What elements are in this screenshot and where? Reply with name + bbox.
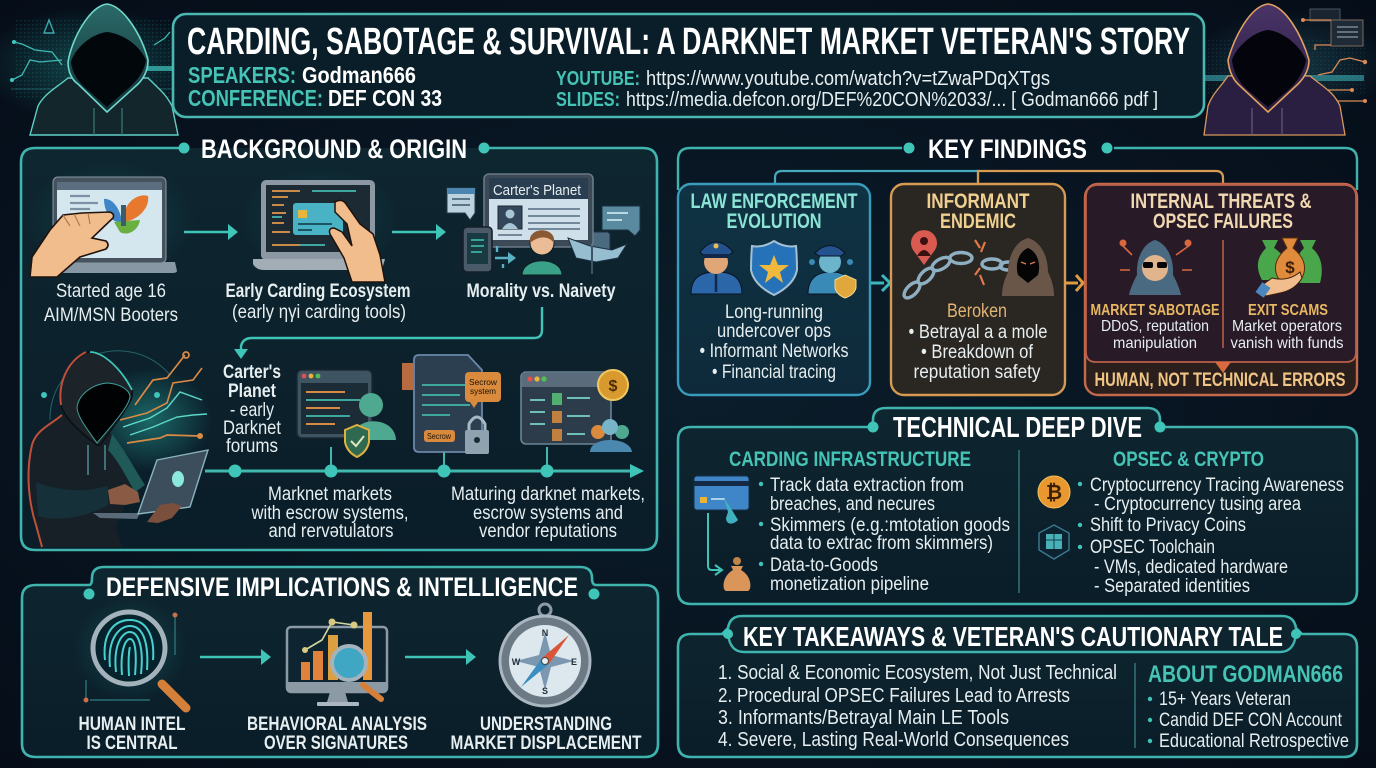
- label: morality vs naivety: Morality vs. Naivety: [466, 281, 616, 302]
- icon: police badge with star: [751, 241, 797, 295]
- subheading: carding infrastructure: CARDING INFRASTRUCTURE: [729, 448, 971, 471]
- label: escrow bubble: Secrow: [469, 378, 497, 387]
- list: carding infrastructure bullets: [759, 475, 1010, 595]
- heading: background and origin: BACKGROUND & ORIGIN: [201, 134, 467, 164]
- arrow: [200, 656, 262, 658]
- arrow head: [436, 224, 446, 240]
- icon: carter's planet forum window with person: [447, 174, 640, 275]
- icon: code window with user and shield: [297, 370, 396, 457]
- youtube label: YOUTUBE:: [556, 68, 640, 90]
- list: carding infrastructure bullets: data to extrac from skimmers): [770, 533, 993, 554]
- label: maturing darknet markets: vendor reputations: [479, 521, 617, 542]
- arrow: [1066, 275, 1083, 291]
- icon: hooded hacker with laptop: [29, 351, 212, 547]
- label: marknet markets: with escrow systems,: [251, 503, 408, 524]
- text: exit scam details: vanish with funds: [1230, 335, 1344, 352]
- icon: credit card with skimmer: [694, 476, 749, 524]
- label: behavioral analysis over signatures: [247, 714, 427, 754]
- icon: compass: [500, 604, 590, 706]
- label: compass west: W: [512, 657, 521, 667]
- label: started age 16: Started age 16: [56, 281, 166, 302]
- text: law enforcement details: [700, 302, 848, 383]
- arrow: [405, 656, 467, 658]
- label: aim msn booters: AIM/MSN Booters: [44, 305, 178, 326]
- icon: police officer: [691, 242, 742, 294]
- label: compass north: N: [542, 628, 548, 638]
- label: dollar coin: $: [609, 378, 618, 395]
- text: informant details: [908, 301, 1048, 383]
- label: early carding ecosystem: Early Carding Ecosystem: [226, 281, 410, 302]
- list: takeaways: 3. Informants/Betrayal Main LE Tools: [718, 707, 1009, 729]
- label: understanding market displacement: UNDERSTANDING: [480, 714, 612, 735]
- text: law enforcement details: • Informant Networks: [700, 341, 848, 362]
- header panel: [173, 14, 1204, 117]
- arrow: [184, 231, 229, 233]
- icon: location pin: [911, 230, 937, 265]
- list: opsec and crypto bullets: Cryptocurrency Tracing Awareness: [1090, 475, 1344, 496]
- label: marknet markets: Marknet markets: [268, 484, 392, 505]
- list: takeaways: 2. Procedural OPSEC Failures Lead to Arrests: [718, 685, 1070, 707]
- text: exit scam details: [1230, 318, 1344, 352]
- arrow: [392, 231, 437, 233]
- label: behavioral analysis over signatures: BEHAVIORAL ANALYSIS: [247, 714, 427, 735]
- label: screen button: Secrow: [427, 432, 451, 441]
- list: carding infrastructure bullets: Data-to-Goods: [770, 555, 878, 576]
- text: informant details: • Breakdown of: [921, 342, 1034, 363]
- text: informant details: • Betrayal a a mole: [908, 322, 1048, 343]
- icon: informant in hood: [1002, 238, 1054, 296]
- label: maturing darknet markets: [451, 484, 645, 542]
- icon: document with escrow bubble and lock: [402, 355, 501, 454]
- text: law enforcement details: • Financial tracing: [712, 362, 836, 383]
- list: carding infrastructure bullets: monetization pipeline: [770, 574, 929, 595]
- icon: officer with shield: [808, 246, 856, 298]
- icon: bitcoin: ₿: [1046, 482, 1062, 504]
- heading: evolution: EVOLUTION: [726, 210, 822, 233]
- icon: bitcoin: [1038, 476, 1070, 508]
- label: understanding market displacement: [450, 714, 642, 754]
- label: market sabotage: MARKET SABOTAGE: [1090, 302, 1220, 319]
- subheading: opsec and crypto: OPSEC & CRYPTO: [1113, 448, 1264, 471]
- heading: law enforcement: LAW ENFORCEMENT: [690, 190, 858, 213]
- list: takeaways: 4. Severe, Lasting Real-World Consequences: [718, 729, 1069, 751]
- header left hooded figure: [0, 4, 200, 135]
- list: about bullets: [1148, 689, 1349, 752]
- label: carter's planet early darknet forums: forums: [226, 436, 278, 457]
- timeline: [205, 447, 644, 478]
- arrow: card to goods: [708, 513, 722, 575]
- label: marknet markets: and rervətulators: [268, 521, 394, 542]
- heading: endemic: ENDEMIC: [940, 210, 1016, 233]
- panel: technical deep dive: [678, 408, 1357, 604]
- label: carter's planet early darknet forums: Carter's: [223, 362, 281, 383]
- slides label: SLIDES:: [556, 89, 620, 111]
- label: compass east: E: [571, 657, 577, 667]
- slides url: https://media.defcon.org/DEF%20CON%2033/... [ Godman666 pdf ]: [626, 89, 1158, 111]
- label: human intel is central: [78, 714, 186, 754]
- list: opsec and crypto bullets: - VMs, dedicated hardware: [1094, 557, 1288, 578]
- label: dollar sign: $: [1285, 258, 1295, 277]
- panel: key takeaways: [678, 616, 1357, 757]
- text: informant details: Beroken: [947, 301, 1007, 322]
- heading: internal threats: INTERNAL THREATS &: [1130, 190, 1312, 213]
- label: carter's planet early darknet forums: [223, 362, 282, 457]
- label: compass south: S: [542, 686, 548, 696]
- icon: money bags: [1255, 238, 1322, 298]
- icon: hooded saboteur: [1120, 240, 1192, 295]
- label: exit scams: EXIT SCAMS: [1248, 302, 1328, 319]
- label: carter's planet early darknet forums: Darknet: [223, 418, 282, 439]
- text: exit scam details: Market operators: [1232, 318, 1342, 335]
- panel: law enforcement evolution: [678, 184, 870, 395]
- arrow: connector to second row: [234, 307, 542, 359]
- list: carding infrastructure bullets: Skimmers (e.g.:mtotation goods: [770, 515, 1010, 536]
- panel: key findings: [678, 134, 1357, 395]
- icon: magnifier with fingerprint: [72, 598, 188, 708]
- arrow: [871, 275, 890, 291]
- panel: informant endemic: [891, 184, 1065, 395]
- heading: technical deep dive: TECHNICAL DEEP DIVE: [893, 412, 1142, 444]
- label: maturing darknet markets: Maturing darknet markets,: [451, 484, 645, 505]
- panel: internal threats and opsec failures: [1085, 184, 1357, 395]
- text: law enforcement details: undercover ops: [717, 321, 831, 342]
- speakers line: SPEAKERS:: [188, 62, 296, 88]
- label: human intel is central: IS CENTRAL: [86, 733, 178, 754]
- heading: defensive implications: DEFENSIVE IMPLICATIONS & INTELLIGENCE: [106, 572, 578, 602]
- text: law enforcement details: Long-running: [725, 302, 823, 323]
- heading: key findings: KEY FINDINGS: [928, 134, 1087, 164]
- icon: broken chain: [901, 240, 1016, 301]
- header right hooded figure: [1190, 4, 1376, 135]
- list: carding infrastructure bullets: breaches, and necures: [770, 494, 935, 515]
- list: opsec and crypto bullets: - Separated identities: [1094, 576, 1250, 597]
- label: carter's planet early darknet forums: - early: [230, 400, 274, 421]
- icon: laptop with butterfly and hand: [25, 160, 195, 280]
- speaker name: Godman666: [302, 62, 416, 88]
- youtube url: https://www.youtube.com/watch?v=tZwaPDqXTgs: [646, 68, 1050, 90]
- label: human intel is central: HUMAN INTEL: [78, 714, 186, 735]
- list: carding infrastructure bullets: Track data extraction from: [770, 475, 964, 496]
- icon: privacy hexagon: [1039, 525, 1069, 559]
- arrow head: [228, 224, 238, 240]
- label: marknet markets: [251, 484, 408, 542]
- icon: laptop with credit card and hand: [240, 165, 400, 282]
- list: takeaways: 1. Social & Economic Ecosystem, Not Just Technical: [718, 662, 1117, 684]
- text: sabotage details: DDoS, reputation: [1101, 318, 1209, 335]
- icon: monitor chart and magnifier: [287, 612, 387, 706]
- list: about bullets: 15+ Years Veteran: [1159, 689, 1291, 710]
- label: early carding tools: (early ηγi carding tools): [232, 302, 406, 323]
- panel: background and origin: [21, 134, 657, 550]
- heading: informant: INFORMANT: [926, 190, 1030, 213]
- arrow head: [261, 649, 271, 665]
- text: sabotage details: [1101, 318, 1209, 352]
- label: carter's planet: Carter's Planet: [493, 182, 582, 199]
- list: opsec and crypto bullets: Shift to Privacy Coins: [1090, 515, 1246, 536]
- heading: opsec failures: OPSEC FAILURES: [1153, 210, 1293, 233]
- label: system bubble: system: [470, 387, 496, 396]
- label: understanding market displacement: MARKET DISPLACEMENT: [450, 733, 642, 754]
- icon: vendor window with coin and people: [521, 370, 632, 452]
- list: opsec and crypto bullets: - Cryptocurrency tusing area: [1094, 494, 1301, 515]
- list: about bullets: Educational Retrospective: [1159, 731, 1349, 752]
- list: takeaways: [718, 662, 1117, 751]
- label: carter's planet early darknet forums: Planet: [228, 381, 277, 402]
- list: opsec and crypto bullets: [1078, 475, 1344, 597]
- label: behavioral analysis over signatures: OVER SIGNATURES: [264, 733, 408, 754]
- conference line: CONFERENCE:: [188, 85, 323, 111]
- icon: goods bag: [724, 557, 750, 591]
- arrow head: [466, 649, 476, 665]
- text: sabotage details: manipulation: [1113, 335, 1197, 352]
- list: opsec and crypto bullets: OPSEC Toolchain: [1090, 537, 1215, 558]
- text: informant details: reputation safety: [914, 362, 1041, 383]
- panel: defensive implications: [22, 567, 658, 757]
- conference name: DEF CON 33: [328, 85, 442, 111]
- label: maturing darknet markets: escrow systems and: [473, 503, 623, 524]
